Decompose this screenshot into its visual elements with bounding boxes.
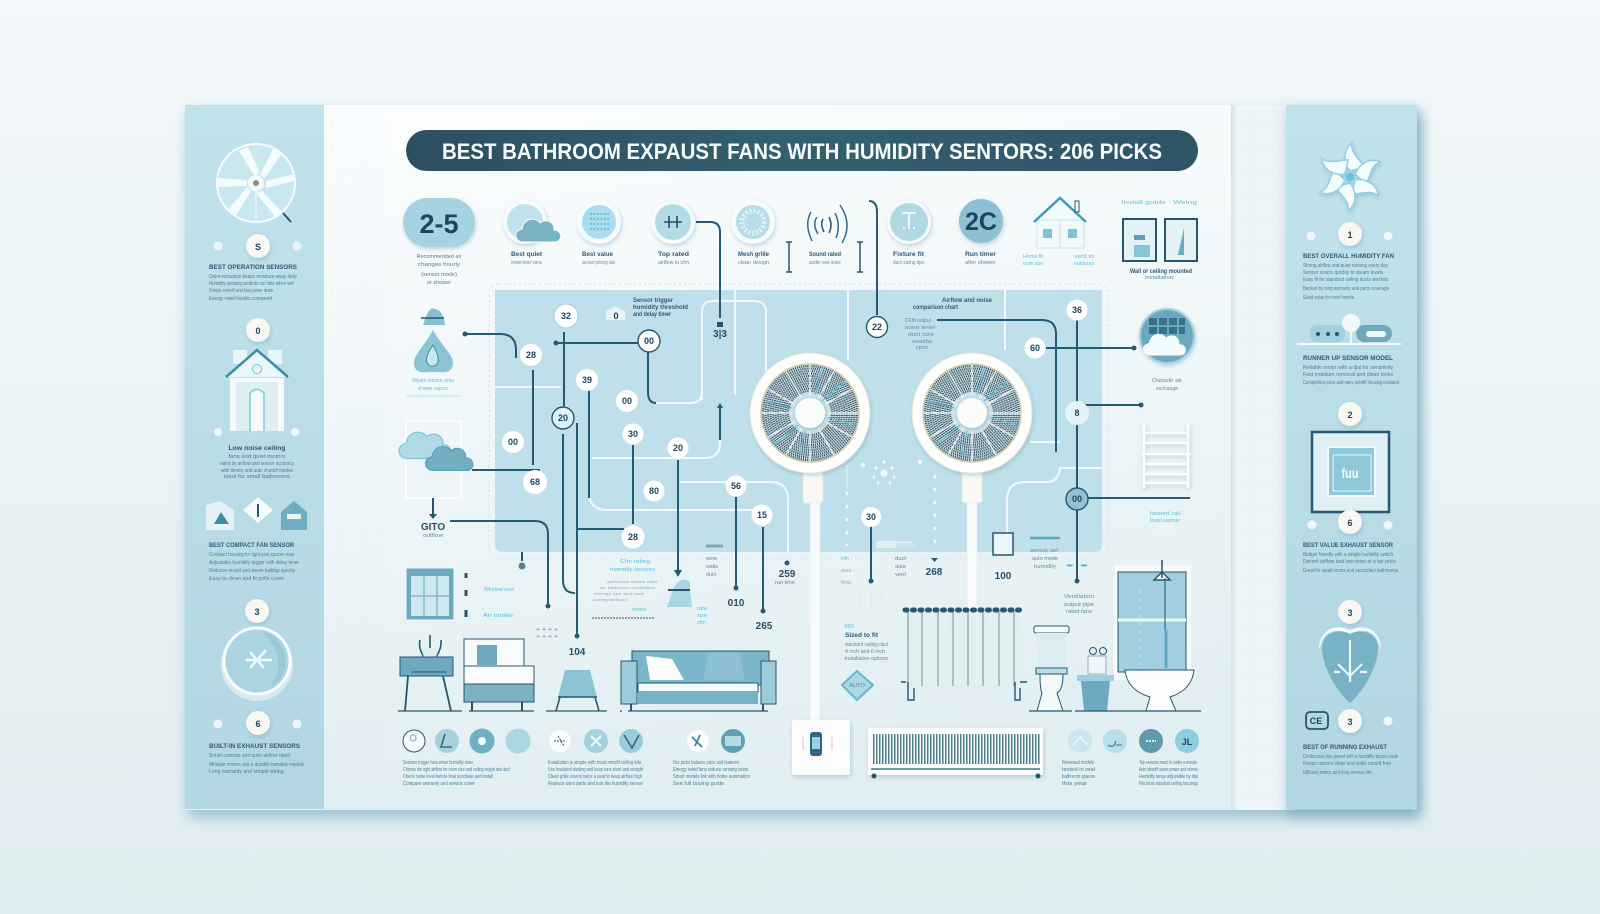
labels below plan, right: installation options [845, 656, 889, 662]
text block: left 2: Low noise ceiling [228, 445, 286, 452]
icon: window [406, 568, 514, 620]
bottom text columns: Smart models link with home automation [673, 774, 750, 780]
labels below plan, left: for bathroom ventilation [600, 585, 655, 590]
text block: right 1: Good value for most homes. [1303, 295, 1355, 301]
text block: right 4 [1303, 744, 1398, 776]
labels below plan, left: 259 [779, 569, 796, 580]
step badge 3 [245, 599, 269, 623]
icon: cloud with window circle: exchange [1156, 386, 1178, 392]
icon: framed tile [1312, 432, 1389, 512]
labels below plan, right: ● ● [1065, 563, 1089, 569]
text block: left 1 [209, 264, 298, 302]
bottom text columns: Humidity range adjustable by dial [1139, 774, 1198, 780]
icon: swirl fan [1314, 143, 1386, 211]
panel labels: CFM output [905, 318, 932, 324]
bottom text columns: Reviewed models [1062, 760, 1094, 766]
icon: ceiling fan [217, 144, 295, 223]
labels below plan, right: cfm [841, 556, 849, 562]
panel labels: Sensor trigger [633, 297, 673, 304]
step badge 3 [1338, 600, 1362, 624]
panel: central blue plan [489, 284, 1108, 558]
icon: airflow droplets [847, 460, 935, 548]
step badge 3 [1338, 709, 1362, 733]
text block: left 1: Energy rated models compared [209, 296, 272, 302]
labels below plan, right [841, 511, 1180, 662]
text block: left 2: rated by airflow and sensor accuracy [220, 461, 294, 467]
icon: heart shield [1319, 627, 1381, 703]
bottom text columns: Energy rated fans reduce running costs [673, 767, 748, 773]
icon: mesh circle [731, 200, 775, 266]
stat: 2C circle: Run timer [965, 251, 996, 258]
step badge 1 [1338, 222, 1362, 246]
text block: right 4: Efficient motor and long service life. [1303, 770, 1373, 776]
labels below plan, left: quiet motor models rated [607, 579, 657, 584]
icon: diamond: AUTO [849, 683, 865, 689]
bottom text columns: Compare warranty and service cover [403, 781, 475, 787]
labels below plan, left: rate [697, 606, 707, 612]
text block: right 4: Keeps mirrors clear and walls mould free [1303, 761, 1391, 767]
panel labels: sone level [905, 325, 935, 331]
bottom text columns: Replace worn parts and test the humidity sensor [548, 781, 643, 787]
number badges: 20 [558, 413, 568, 423]
text block: left 4 [209, 743, 304, 775]
labels below plan, left: run time [775, 580, 795, 586]
stat: 2C circle [959, 199, 1003, 266]
icon: towel rail [1141, 423, 1191, 488]
step badge 2 [1338, 402, 1362, 426]
bottom text columns: Use insulated ducting and keep runs short and straight [548, 767, 643, 773]
labels below plan, left: energy use and size [594, 591, 645, 596]
text block: right 2: Fast moisture removal and clean looks [1303, 372, 1393, 378]
icon: sound waves: under one sone [809, 260, 841, 266]
bottom text columns: Clean grille covers twice a year to keep airflow high [548, 774, 642, 780]
icon: framed panels [1121, 200, 1197, 281]
number badges: 00 [508, 437, 518, 447]
text block: right 2: Competitive price and easy retrofit housing included [1303, 380, 1399, 386]
stat: 2-5 pill: 2-5 [419, 209, 459, 239]
number badges: 36 [1072, 305, 1082, 315]
labels below plan, right: flow [841, 580, 851, 586]
panel labels [606, 297, 992, 351]
stat: 2-5 pill: (sensor mode) [421, 272, 457, 278]
plan routing lines [495, 290, 1102, 552]
panel labels: comparison chart [913, 304, 959, 311]
panel labels: humidity threshold [633, 304, 688, 311]
icon: framed panels: Wall or ceiling mounted [1130, 268, 1192, 275]
stat: 2C circle: after shower [965, 260, 996, 266]
step badge 6: 6 [255, 719, 261, 729]
step badge 0: 0 [255, 326, 261, 336]
bottom text columns: Auto shutoff saves power and money [1139, 767, 1198, 773]
text block: right 1 [1303, 253, 1394, 301]
panel labels: Airflow and noise [942, 297, 992, 304]
icon: label chip [1306, 712, 1328, 729]
icon: house outline: outdoors [1074, 261, 1094, 267]
icon: radiator [901, 610, 1027, 700]
icon: framed panels: installation [1145, 275, 1173, 281]
bottom text columns: Sensors trigger fans when humidity rises [403, 760, 473, 766]
text block: right 1: Strong airflow and quiet running every day [1303, 263, 1388, 269]
text block: right 3: Great for small rooms and secondary bathrooms [1303, 568, 1398, 574]
panel: left sidebar [185, 105, 324, 809]
labels below plan, right: Ventilation [1064, 594, 1094, 600]
step badge 6: 6 [1347, 518, 1353, 528]
icon: framed tile: fuu [1342, 465, 1358, 481]
icon: house outline: Home fit [1023, 254, 1043, 260]
text block: left 4: Long warranty and simple wiring. [209, 769, 285, 775]
infographic sheet [185, 105, 1417, 810]
icon: small ornaments [214, 242, 302, 250]
number badges: 32 [561, 311, 571, 321]
labels below plan, left: watts [706, 564, 719, 570]
text block: left 1: Simple retrofit and low power draw [209, 288, 273, 294]
labels below plan, right: towel warmer [1150, 518, 1180, 524]
step badge 6 [1338, 510, 1362, 534]
icon: cloud circle: Best quiet [511, 251, 543, 258]
text block: right 4: Continuous low speed with a humidity boost mode [1303, 754, 1398, 760]
labels below plan, left: comparison [593, 597, 628, 602]
icon: shower drop: Steam source area [412, 378, 455, 384]
number badges: 20 [673, 443, 683, 453]
labels below plan, right: auto mode [1032, 556, 1058, 562]
text block: left 3: Compact housing for tight joist spaces now [209, 552, 294, 558]
text block: right 2 [1303, 355, 1399, 386]
floor line [398, 710, 768, 712]
bottom text columns: Choose the right airflow for room size and ceiling height and duct [403, 767, 510, 773]
icon: toggle slider [1297, 314, 1401, 344]
step badge 3: 3 [1347, 717, 1353, 727]
number badges: 8 [1074, 408, 1080, 418]
text block: left 1: Quiet extraction keeps moisture away daily [209, 274, 297, 280]
ornament [1384, 716, 1392, 726]
icon: window: Window vent [484, 587, 514, 593]
floor vent [868, 728, 1043, 778]
icon: bathtub basin [1029, 670, 1201, 711]
icon: ornaments [214, 720, 302, 728]
text block: right 2: Reliable motor with a dial for sensitivity [1303, 365, 1393, 371]
bottom text columns: Top sensors react in under a minute [1139, 760, 1197, 766]
step badge 3: 3 [254, 607, 260, 617]
stat: 2-5 pill: Recommended air [416, 254, 462, 260]
bottom text columns: Fits most standard ceiling housings [1139, 781, 1198, 787]
bottom icon row [403, 728, 1199, 754]
text block: left 3 [209, 542, 299, 582]
icon: toilet [1034, 626, 1069, 711]
labels below plan, right: heated rail [1150, 511, 1180, 517]
labels below plan, right: output pipe [1064, 602, 1094, 608]
icon: sofa [621, 651, 776, 711]
number badges: 28 [526, 350, 536, 360]
arrow: cloud to label: GITO [421, 522, 445, 533]
icon: sound waves: Sound rated [809, 251, 841, 258]
number badges: 56 [731, 481, 741, 491]
icon: armchair [464, 639, 534, 711]
icon: cloud with window circle: Outside air [1152, 378, 1182, 384]
labels below plan, left: 104 [569, 647, 586, 658]
text block: left 2: with timers and auto shutoff modes [220, 468, 293, 474]
stat: 2-5 pill [403, 198, 475, 286]
labels below plan, left: sone [706, 556, 717, 562]
labels below plan, right: 360 [844, 624, 854, 630]
number badges: 00 [644, 336, 654, 346]
text block: right 3: Budget friendly with a simple humidity switch [1303, 552, 1393, 558]
text block: left 3: BEST COMPACT FAN SENSOR [209, 542, 294, 549]
icon: house [214, 350, 299, 436]
labels below plan, right: vent [895, 572, 907, 578]
step badge 0 [246, 318, 270, 342]
icon: fixture circle: duct sizing tips [893, 260, 924, 266]
bottom text columns: bathroom spaces [1062, 774, 1095, 780]
icon: cloud with window circle [1140, 309, 1194, 392]
icon: side cabinet [1077, 648, 1114, 711]
icon: clouds frame [399, 421, 473, 498]
labels below plan, left: size [697, 613, 707, 619]
icon: window: Air intake [483, 613, 513, 619]
step badge S: S [255, 242, 261, 252]
labels below plan, left: cfm [697, 620, 706, 626]
number badges: 80 [649, 486, 659, 496]
text block: left 2 [220, 445, 294, 480]
number badges [502, 300, 1089, 548]
stat: 2-5 pill: changes hourly [418, 262, 460, 268]
text block: left 2: ideal for small bathrooms [224, 474, 290, 480]
bottom text columns [403, 760, 1198, 787]
panel labels: watts [912, 339, 933, 345]
icon: shower drop: shower vapour [418, 386, 448, 392]
title banner: BEST BATHROOM EXPAUST FANS WITH HUMIDITY SENTORS: 206 PICKS [442, 139, 1162, 164]
icon: fixture circle [887, 200, 931, 266]
labels below plan, right: standard ceiling duct [845, 642, 889, 648]
text block: right 4: BEST OF RUNNING EXHAUST [1303, 744, 1387, 751]
labels below plan, right: Sized to fit [845, 632, 879, 639]
text block: left 3: Easy to clean and fit grille cover [209, 576, 284, 582]
text block: left 4: BUILT-IN EXHAUST SENSORS [209, 743, 301, 750]
icon: dial circle: airflow in cfm [658, 260, 689, 266]
arrow: cloud to label [421, 498, 445, 539]
number badges: 30 [866, 512, 876, 522]
icon: grid circle: Best value [582, 251, 613, 258]
text block: right 3 [1303, 542, 1398, 574]
labels below plan, right: 4 inch and 6 inch [845, 649, 885, 655]
text block: right 1: BEST OVERALL HUMIDITY FAN [1303, 253, 1394, 260]
icon: round dial [221, 628, 293, 701]
text block: right 3: BEST VALUE EXHAUST SENSOR [1303, 542, 1393, 549]
icon: grid circle: sensor pricing low [582, 260, 615, 266]
bottom icon row: JL [1182, 737, 1193, 747]
text block: left 2: fans and quiet motors [228, 454, 286, 460]
panel: right sidebar [1286, 105, 1417, 809]
icon: mesh circle: Mesh grille [738, 251, 769, 258]
labels below plan, left [536, 546, 796, 658]
icon: stool [556, 670, 599, 711]
labels below plan, right: duct [895, 556, 907, 562]
text block: right 2: RUNNER UP SENSOR MODEL [1303, 355, 1393, 362]
labels below plan, left: Cfm rating [620, 559, 650, 565]
text block: right 1: Easy fit for standard ceiling ducts and kits [1303, 277, 1388, 283]
icon: framed panels: Install guide · Wiring [1121, 200, 1197, 206]
fan left [750, 353, 870, 721]
number badges: 30 [628, 429, 638, 439]
bottom text columns: Check noise level before final purchase and install [403, 774, 493, 780]
number badges: 00 [622, 396, 632, 406]
icon: house outline: vent to [1074, 254, 1094, 260]
number badges: 22 [872, 322, 882, 332]
labels below plan, right: size [895, 564, 906, 570]
labels below plan, right: humidity [1034, 564, 1057, 570]
icon: house outline [1023, 198, 1094, 267]
stat: 2C circle: 2C [965, 208, 997, 236]
arrow: cloud to label: outflow [423, 533, 443, 539]
icon: label chip: CE [1310, 716, 1322, 726]
icon: diamond [842, 671, 873, 700]
switch box [792, 720, 850, 775]
text block: left 1: Humidity sensing controls run time when wet [209, 281, 294, 287]
connector lines [450, 201, 1190, 638]
icons: three small tiles [206, 497, 307, 530]
bottom text columns: Our picks balance price and features [673, 760, 739, 766]
text block: left 1: BEST OPERATION SENSORS [209, 264, 298, 271]
labels below plan, right: area [841, 568, 852, 574]
number badges: 28 [628, 532, 638, 542]
number badges: 15 [757, 510, 767, 520]
bottom text columns: tested in real [1062, 767, 1095, 773]
ornaments [1306, 232, 1392, 240]
text block: right 1: Sensor reacts quickly to steam levels [1303, 270, 1383, 276]
text block: right 1: Backed by long warranty and parts coverage [1303, 286, 1389, 292]
step badge 2: 2 [1347, 410, 1353, 420]
step badge S [246, 234, 270, 258]
bottom text columns: this year [1062, 781, 1087, 787]
bottom text columns: Installation is simple with most retrofit ceiling kits [548, 760, 641, 766]
panel labels: 3|3 [713, 329, 727, 340]
icon: mesh circle: clean design [738, 260, 769, 266]
number badges: 39 [582, 375, 592, 385]
text block: left 3: Adjustable humidity trigger with delay timer [209, 560, 299, 566]
number badges: 68 [530, 477, 540, 487]
ornaments [1308, 520, 1392, 530]
icon: dial circle: Top rated [658, 251, 689, 258]
panel labels: 0 [613, 311, 619, 321]
labels below plan, right: 100 [995, 571, 1012, 582]
icon: shower window [1114, 560, 1191, 680]
icon: shower drop [407, 308, 460, 396]
labels below plan, right: rated fans [1066, 609, 1093, 615]
text block: right 3: Decent airflow and low noise at a fair price [1303, 559, 1396, 565]
fan right [912, 353, 1032, 609]
step badge 3: 3 [1347, 608, 1353, 618]
icon: cloud circle: noise level sone [511, 260, 542, 266]
icon: house outline: room size [1023, 261, 1043, 267]
icon: fixture circle: Fixture fit [893, 251, 925, 258]
labels below plan, left: + + + + [536, 634, 558, 640]
panel labels: rpm [916, 345, 928, 351]
panel labels: duct size [908, 332, 934, 338]
icon: cloud circle [503, 200, 561, 266]
labels below plan, left: + + + + [536, 627, 558, 633]
number badges: 60 [1030, 343, 1040, 353]
stat: 2-5 pill: or shower [427, 280, 451, 286]
labels below plan, left: humidity sensors [610, 567, 655, 573]
panel labels: and delay timer [633, 311, 671, 318]
labels below plan, left: duct [706, 572, 717, 578]
icon: sound waves [786, 205, 863, 272]
labels below plan, left: 010 [728, 598, 745, 609]
bottom text columns: See full buying guide [673, 781, 724, 787]
text block: left 4: Smart controls and quiet airflow rated [209, 753, 290, 759]
icon: dial circle [651, 200, 695, 266]
title banner [406, 130, 1198, 171]
icon: grid circle [577, 200, 621, 266]
icon: side table with plant [400, 635, 453, 711]
number badges: 00 [1072, 494, 1082, 504]
text block: left 3: Reduces mould and steam buildup quickly [209, 568, 295, 574]
text block: left 4: Whisper motors and a durable humidity module [209, 762, 304, 768]
labels below plan, right: sensor set [1030, 548, 1059, 554]
labels below plan, right: 268 [926, 567, 943, 578]
step badge 1: 1 [1347, 230, 1353, 240]
step badge 6 [246, 711, 270, 735]
labels below plan, left: notes [632, 607, 646, 613]
labels below plan, left: 265 [756, 621, 773, 632]
